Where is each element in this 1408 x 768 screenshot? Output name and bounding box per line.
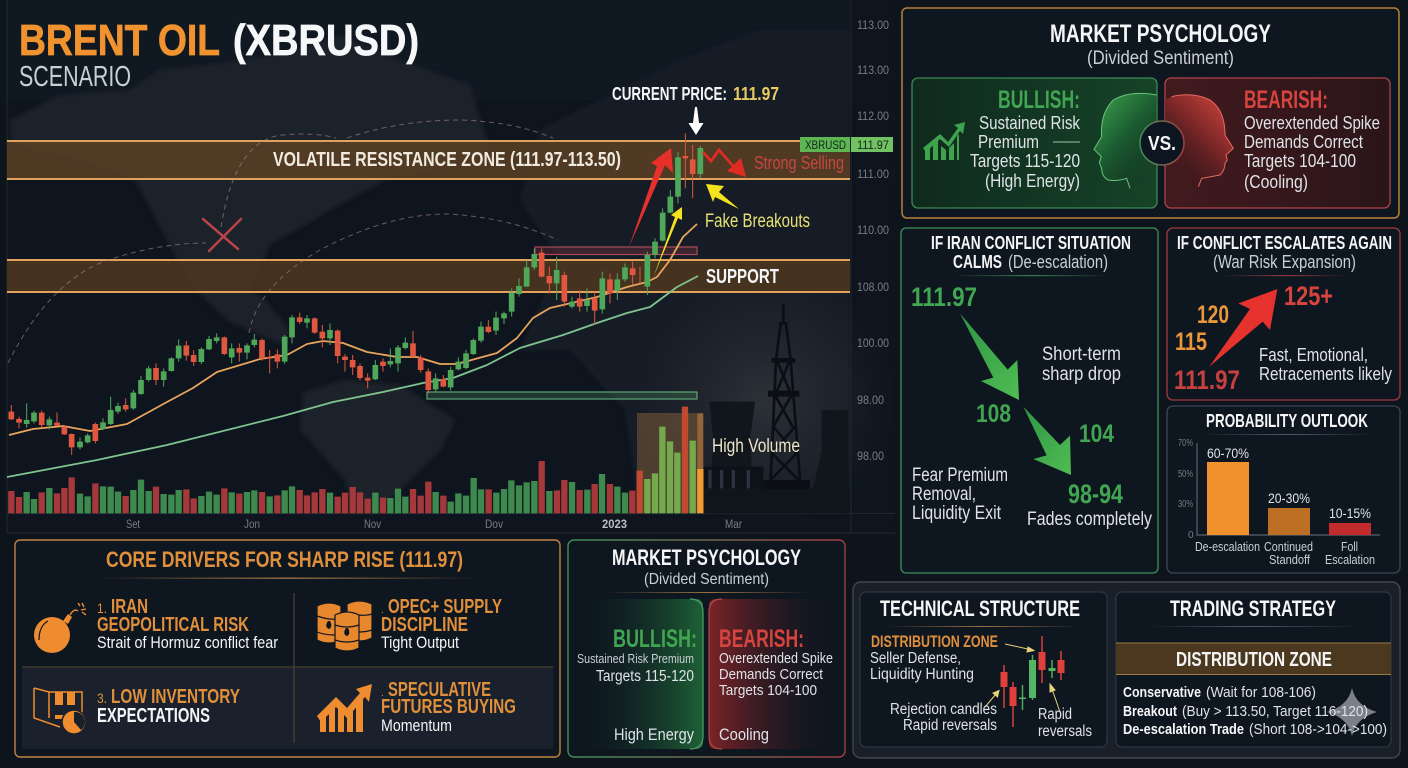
bar chart: 0 xyxy=(1188,530,1194,541)
price: 111.97: 111.97 xyxy=(1174,365,1240,395)
strategy list: (Buy > 113.50, Target 116-120) xyxy=(1182,703,1368,720)
price axis labels: 108.00 xyxy=(857,282,889,294)
text: seller defense: Seller Defense, xyxy=(870,650,961,667)
driver 4: speculative buying: FUTURES BUYING xyxy=(381,696,516,718)
bearish card: Demands Correct xyxy=(1244,131,1363,152)
bullish column: High Energy xyxy=(614,725,694,744)
price axis labels: 100.00 xyxy=(857,338,889,350)
panel: market psychology top xyxy=(902,8,1399,218)
banner: distribution zone: DISTRIBUTION ZONE xyxy=(1176,649,1332,671)
note: short-term sharp drop: sharp drop xyxy=(1042,364,1121,385)
price: 111.97: 111.97 xyxy=(911,282,977,312)
icon: sparkle xyxy=(1327,688,1377,736)
title: BRENT OIL xyxy=(19,16,220,65)
arrow: big red breakout xyxy=(629,148,673,247)
label: volatile resistance zone: VOLATILE RESISTANCE ZONE (111.97-113.50) xyxy=(273,149,621,171)
heading: TRADING STRATEGY xyxy=(1170,596,1336,621)
bar chart: Foll xyxy=(1341,539,1358,554)
rejection box above support xyxy=(535,247,697,254)
note: fear premium removal: Removal, xyxy=(912,484,976,505)
bullish card: (High Energy) xyxy=(985,170,1080,191)
price axis labels xyxy=(857,20,889,463)
strategy list: Conservative xyxy=(1123,684,1201,701)
label: current price: 111.97 xyxy=(733,84,779,104)
price axis labels: 98.00 xyxy=(857,451,884,463)
panel: main price chart xyxy=(7,0,895,533)
panel: technical structure xyxy=(860,592,1107,747)
bullish card: Premium xyxy=(978,131,1039,152)
panel: probability outlook xyxy=(1167,406,1400,573)
panel: escalation scenario xyxy=(1167,228,1400,400)
driver 1: Iran risk: GEOPOLITICAL RISK xyxy=(97,614,249,636)
note: Fast, Emotional, xyxy=(1259,345,1368,365)
subheading: (Divided Sentiment) xyxy=(1087,48,1234,69)
price tag: XBRUSD 111.97: 111.97 xyxy=(857,140,889,152)
text: rapid reversals: Rapid xyxy=(1038,706,1072,723)
price axis labels: 110.00 xyxy=(857,225,889,237)
bearish column: Demands Correct xyxy=(719,666,824,683)
heading xyxy=(1177,233,1392,272)
label: high volume: High Volume xyxy=(712,436,800,457)
note: fades completely: Fades completely xyxy=(1027,509,1152,530)
price: 115: 115 xyxy=(1175,328,1207,356)
driver 1: Iran risk: Strait of Hormuz conflict fear xyxy=(97,633,278,652)
chart frame lines xyxy=(7,0,895,533)
driver 3: low inventory: 3. xyxy=(97,690,107,706)
bearish column: Cooling xyxy=(719,725,769,744)
price: 108: 108 xyxy=(976,400,1011,428)
moving average: orange xyxy=(9,224,697,435)
arrow: fake breakout yellow lower xyxy=(653,207,682,278)
icon: green head xyxy=(1094,93,1157,188)
bullish card: Targets 115-120 xyxy=(970,150,1080,171)
time axis labels: Set xyxy=(126,519,141,531)
arrow: surge xyxy=(1209,289,1277,367)
bearish card: Overextended Spike xyxy=(1244,112,1380,133)
bearish card xyxy=(1165,78,1390,208)
driver 4: speculative buying xyxy=(317,679,516,735)
driver 3: low inventory: EXPECTATIONS xyxy=(97,705,210,727)
price tag: XBRUSD 111.97 xyxy=(800,137,893,152)
driver 4: speculative buying: SPECULATIVE xyxy=(388,679,491,701)
bearish card: (Cooling) xyxy=(1244,171,1308,192)
panel: de-escalation scenario xyxy=(901,228,1158,573)
bar chart: Escalation xyxy=(1325,552,1375,567)
VS badge: VS. xyxy=(1148,133,1176,155)
price axis labels: 98.00 xyxy=(857,395,884,407)
driver 2: OPEC+: . xyxy=(381,605,384,616)
price tag: XBRUSD 111.97: XBRUSD xyxy=(805,140,846,152)
driver 4: speculative buying: . xyxy=(381,688,384,699)
label: support: SUPPORT xyxy=(706,266,779,288)
note: short-term sharp drop xyxy=(1042,344,1121,385)
strategy list: De-escalation Trade xyxy=(1123,721,1244,738)
bar chart: 30% xyxy=(1178,499,1193,510)
price axis labels: 113.00 xyxy=(857,65,889,77)
heading: MARKET PSYCHOLOGY xyxy=(1050,20,1271,48)
text: seller defense xyxy=(870,650,974,683)
panel: core drivers xyxy=(15,540,560,757)
arrow: to rejection candle xyxy=(985,690,999,707)
driver 2: OPEC+: DISCIPLINE xyxy=(381,614,468,636)
bar chart: 60-70% xyxy=(1207,445,1249,461)
note: fear premium removal: Liquidity Exit xyxy=(912,503,1002,524)
industrial silhouette: oil rig and cooling towers xyxy=(703,303,850,513)
subheading: (Divided Sentiment) xyxy=(644,571,769,588)
note: fear premium removal xyxy=(912,465,1008,524)
arrow: current price pointer xyxy=(688,107,704,135)
accumulation box under lows xyxy=(427,392,697,399)
heading: TECHNICAL STRUCTURE xyxy=(880,596,1080,621)
strategy list: (Wait for 108-106) xyxy=(1206,684,1316,701)
heading xyxy=(931,233,1131,272)
bearish column: BEARISH: xyxy=(719,625,804,653)
driver 3: low inventory: LOW INVENTORY xyxy=(111,686,240,708)
heading: MARKET PSYCHOLOGY xyxy=(612,545,801,570)
bearish column: Targets 104-100 xyxy=(719,682,817,699)
arrow: to reversal candle xyxy=(1050,684,1060,712)
bullish card: BULLISH: xyxy=(998,86,1080,114)
time axis labels: 2023 xyxy=(602,519,627,531)
driver 2: OPEC+ xyxy=(317,596,502,652)
panel: market psychology lower xyxy=(568,540,845,757)
heading: (War Risk Expansion) xyxy=(1213,252,1356,272)
heading: IF IRAN CONFLICT SITUATION xyxy=(931,233,1131,253)
label: current price: CURRENT PRICE: xyxy=(612,84,727,104)
bar chart: Standoff xyxy=(1269,552,1310,567)
time axis labels xyxy=(126,519,742,531)
heading: CALMS xyxy=(953,252,1002,272)
text: rejection candles xyxy=(890,701,997,734)
bearish column xyxy=(709,599,843,749)
time axis labels: Jon xyxy=(244,519,260,531)
note: fear premium removal: Fear Premium xyxy=(912,465,1008,486)
driver 4: speculative buying: Momentum xyxy=(381,716,452,735)
arrow: strong selling zigzag xyxy=(703,150,746,177)
price: 125+: 125+ xyxy=(1284,281,1333,311)
bullish column: Sustained Risk Premium xyxy=(577,652,694,666)
bullish column: BULLISH: xyxy=(613,625,697,653)
text: rejection candles: Rejection candles xyxy=(890,701,997,718)
arrow: first drop xyxy=(960,313,1019,400)
bar chart: De-escalation xyxy=(1195,539,1260,554)
time axis labels: Dov xyxy=(485,519,503,531)
strategy list xyxy=(1123,684,1387,738)
bar chart: 20-30% xyxy=(1268,490,1310,506)
text: seller defense: Liquidity Hunting xyxy=(870,666,974,683)
title: (XBRUSD) xyxy=(233,16,419,65)
label: fake breakouts: Fake Breakouts xyxy=(705,211,810,232)
driver 2: OPEC+: Tight Output xyxy=(381,633,459,652)
bar chart: 70% xyxy=(1178,438,1193,449)
icon: box and clock xyxy=(34,688,86,734)
bullish column xyxy=(572,599,703,749)
icon: oil barrels xyxy=(317,601,372,651)
bearish card: BEARISH: xyxy=(1244,86,1328,114)
panel: trading strategy xyxy=(1116,592,1391,747)
label: strong selling: Strong Selling xyxy=(754,153,844,173)
driver 1: Iran risk xyxy=(34,596,278,653)
price: 98-94: 98-94 xyxy=(1068,479,1123,509)
icon: rising futures chart xyxy=(317,684,372,732)
price: 104: 104 xyxy=(1079,420,1114,448)
time axis labels: Nov xyxy=(364,519,381,531)
arrow: to zone candle xyxy=(1005,644,1034,652)
bullish card xyxy=(912,78,1157,208)
price axis labels: 112.00 xyxy=(857,111,889,123)
mini candlesticks xyxy=(1004,636,1061,727)
bar chart xyxy=(1178,438,1380,567)
driver 2: OPEC+: OPEC+ SUPPLY xyxy=(388,596,502,618)
bar chart: 50% xyxy=(1178,469,1193,480)
dashed projection arcs xyxy=(8,120,558,363)
banner: distribution zone xyxy=(1116,643,1391,674)
bullish card: Sustained Risk xyxy=(979,112,1081,133)
text: rejection candles: Rapid reversals xyxy=(903,717,997,734)
driver 1: Iran risk: IRAN xyxy=(111,596,148,618)
icon: rising chart xyxy=(923,122,965,160)
driver 3: low inventory xyxy=(34,686,240,734)
label: distribution zone: DISTRIBUTION ZONE xyxy=(871,633,998,651)
icon: red cross marker xyxy=(203,219,241,251)
heading: CORE DRIVERS FOR SHARP RISE (111.97) xyxy=(106,547,463,572)
bullish column: Targets 115-120 xyxy=(596,668,694,685)
note: short-term sharp drop: Short-term xyxy=(1042,344,1121,365)
subtitle: SCENARIO xyxy=(19,61,131,93)
icon: bomb xyxy=(34,603,86,653)
bearish column: Overextended Spike xyxy=(719,650,833,667)
VS badge xyxy=(1140,121,1184,165)
bearish card: Targets 104-100 xyxy=(1244,150,1356,171)
volume bars xyxy=(11,407,703,513)
panel: technical and strategy container xyxy=(853,582,1400,758)
zone: support band xyxy=(7,260,850,292)
moving average: green xyxy=(7,276,698,477)
arrow: fake breakout yellow top xyxy=(706,184,739,209)
text: rapid reversals: reversals xyxy=(1038,723,1092,740)
price axis labels: 113.00 xyxy=(857,20,889,32)
heading: (De-escalation) xyxy=(1008,252,1108,272)
zone: volatile resistance band xyxy=(7,141,850,179)
strategy list: (Short 108->104->100) xyxy=(1249,721,1387,738)
time axis labels: Mar xyxy=(725,519,742,531)
price axis labels: 111.00 xyxy=(857,169,889,181)
note xyxy=(1259,345,1392,384)
icon: red head xyxy=(1165,95,1233,187)
strategy list: Breakout xyxy=(1123,703,1177,720)
bar chart: Continued xyxy=(1264,539,1313,554)
bar chart: 10-15% xyxy=(1329,505,1371,521)
text: rapid reversals xyxy=(1038,706,1092,740)
driver 1: Iran risk: 1. xyxy=(97,600,107,616)
arrow: second drop xyxy=(1023,407,1071,475)
candlesticks xyxy=(11,133,700,455)
title xyxy=(19,16,419,93)
price: 120: 120 xyxy=(1197,301,1229,329)
